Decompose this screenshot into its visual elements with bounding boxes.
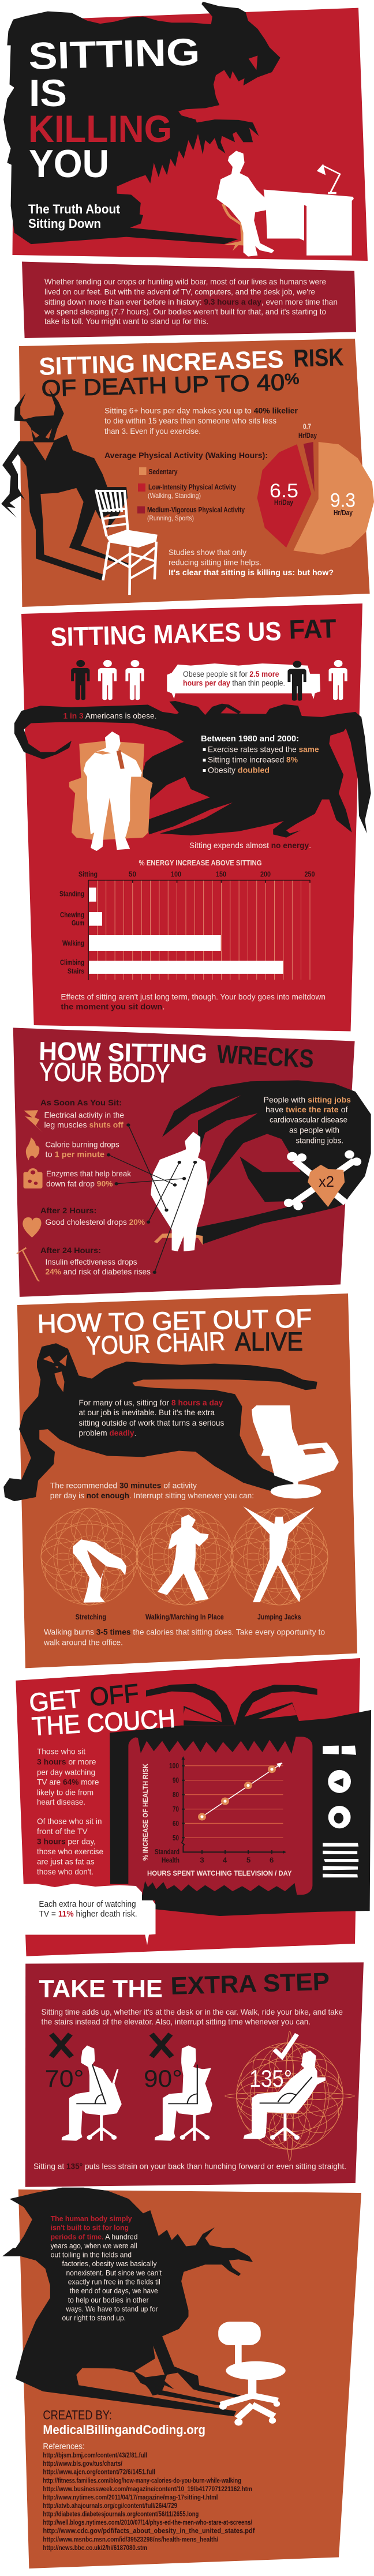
heading: makes us fat: FAT [289, 613, 336, 644]
closing text: our right to stand up. [62, 2313, 126, 2322]
studies text [169, 548, 334, 577]
posture 70 degrees [45, 2034, 122, 2141]
heading: wrecks your body [39, 1036, 315, 1088]
references: http://atvb.ahajournals.org/cgi/content/full/26/4/729 [43, 2502, 177, 2510]
heading: Sitting Is Killing You: SITTING [28, 30, 200, 77]
panel: sitting makes us fat [14, 603, 371, 1032]
text: tv heart disease [37, 1747, 103, 1876]
text: 8 hours a day: problem deadly. [78, 1428, 136, 1438]
bar chart: energy increase: Walking [62, 939, 84, 947]
pie chart: Hr/Day [298, 431, 317, 440]
effects after 24 hours: 24% and risk of diabetes rises [45, 1267, 151, 1276]
body text: 40% likelier: than 3. Even if you exercise. [104, 426, 201, 436]
panel: title [3, 2, 368, 261]
stats: 1980 to 2000: Between 1980 and 2000: [201, 734, 299, 744]
heading: Sitting Is Killing You: YOU [29, 142, 109, 186]
icons: lightning, flame, scale, heart, syringe [16, 1110, 43, 1281]
text: sitting jobs: as people with [289, 1126, 339, 1135]
text: 8 hours a day: For many of us, sitting for 8 hours a day [78, 1398, 223, 1407]
stats: 1980 to 2000 [201, 734, 319, 774]
text: tv heart disease: 3 hours per day, [37, 1837, 96, 1846]
line chart: health risk: % INCREASE OF HEALTH RISK [143, 1763, 149, 1861]
effects after 2 hours: After 2 Hours: [40, 1206, 96, 1215]
heading: risk of death [39, 343, 344, 402]
monster shadow: bear [3, 2, 280, 244]
posture 135 degrees: 135° [249, 2065, 292, 2092]
bar chart: energy increase: Climbing [60, 958, 84, 967]
line chart: health risk: HOURS SPENT WATCHING TELEVISION / DAY [147, 1869, 292, 1877]
text: sitting jobs: People with sitting jobs [264, 1095, 351, 1104]
closing text: to help our bodies in other [68, 2296, 149, 2304]
monster hand [162, 1080, 371, 1244]
line chart: health risk: 5 [246, 1855, 250, 1865]
references: http://diabetes.diabetesjournals.org/content/56/11/2655.long [43, 2510, 199, 2518]
heading: chair alive: HOW TO GET OUT OF [37, 1303, 312, 1338]
effects as soon as you sit: to 1 per minute [45, 1150, 104, 1159]
chart legend: (Walking, Standing) [148, 492, 201, 500]
text: less strain: Sitting at 135° puts less strain on your back than hunching forward or even sitting straight. [33, 2162, 346, 2171]
crossbones with heart x2: x2 [319, 1173, 334, 1190]
bar chart: energy increase [59, 859, 315, 980]
posture 135 degrees [244, 2034, 326, 2141]
closing text: isn't built to sit for long [51, 2223, 129, 2232]
TV buttons and knobs [323, 1746, 358, 1877]
pie chart [257, 422, 374, 554]
references [43, 2442, 255, 2552]
intro text: we spend sleeping (7.7 hours). Our bodies weren't built for that, and it's starting to [44, 307, 326, 316]
closing text: exactly run free in the fields til [68, 2278, 160, 2286]
man in armchair [69, 732, 153, 851]
bar chart: energy increase: 50 [129, 870, 136, 879]
heading: Sitting Is Killing You [28, 30, 200, 186]
chart legend: (Running, Sports) [147, 514, 194, 522]
bar chart: energy increase: % ENERGY INCREASE ABOVE SITTING [139, 859, 262, 867]
posture 90 degrees: 90° [144, 2065, 182, 2092]
line chart: health risk: 3 [200, 1855, 204, 1865]
text: sitting jobs [264, 1095, 351, 1145]
line chart: health risk [143, 1756, 292, 1877]
effects after 24 hours: After 24 Hours: [40, 1246, 101, 1255]
stats: 1980 to 2000: Exercise rates stayed the same [208, 744, 319, 753]
line chart: health risk: 60 [173, 1819, 179, 1828]
exercise figures [73, 1506, 315, 1603]
text: meltdown: Effects of sitting aren't just long term, though. Your body goes into meltdown [61, 992, 326, 1002]
line chart: health risk: 6 [270, 1855, 274, 1865]
closing text: factories, obesity was basically [62, 2259, 157, 2268]
references: http://www.bls.gov/tus/charts/ [43, 2459, 123, 2468]
chart legend [104, 451, 268, 522]
white office chair [252, 1405, 339, 1498]
bar chart: energy increase: 100 [171, 870, 181, 879]
text: sitting jobs: standing jobs. [296, 1135, 343, 1145]
chart legend: Average Physical Activity (Waking Hours): [104, 451, 268, 460]
heading: chair alive: YOUR CHAIR [86, 1326, 226, 1360]
closing text: ways. We have to stand up for [66, 2304, 158, 2313]
heading: risk of death: RISK [293, 343, 344, 373]
bar chart: energy increase: Gum [72, 918, 84, 927]
heading: risk of death: OF DEATH UP TO 40 [41, 370, 264, 402]
exercise labels: Jumping Jacks [257, 1613, 301, 1621]
panel: risk of death [1, 339, 374, 607]
ghost monster [3, 1343, 317, 1501]
couch with obesity stat: Obese people sit for 2.5 more [183, 670, 279, 678]
callout: 11% higher death risk [0, 1884, 156, 1945]
chart legend: Low-Intensity Physical Activity [148, 483, 237, 492]
panel: introduction [22, 262, 356, 338]
seated man [151, 1132, 208, 1251]
exercise labels: Stretching [76, 1613, 106, 1621]
effects as soon as you sit: As Soon As You Sit: [40, 1098, 122, 1107]
references: References: [43, 2442, 85, 2451]
body text: 40% likelier [104, 406, 298, 436]
heading: chair alive [37, 1303, 312, 1360]
intro text: Whether tending our crops or hunting wild boar, most of our lives as humans were [44, 277, 326, 286]
closing text: The human body simply [51, 2214, 132, 2223]
line chart: health risk: Standard [155, 1847, 179, 1856]
references: http://news.bbc.co.uk/2/hi/6187080.stm [43, 2544, 147, 2552]
text: tv heart disease: Of those who sit in [37, 1816, 102, 1825]
bar chart: energy increase: 200 [260, 870, 271, 879]
text: 30 minutes: per day is not enough. Interrupt sitting whenever you can: [50, 1491, 254, 1500]
body text: 40% likelier: to die within 15 years than someone who sits less [104, 416, 276, 425]
references: http://www.ajcn.org/content/72/6/1451.full [43, 2468, 155, 2476]
heading: wrecks your body: WRECKS [216, 1039, 315, 1074]
studies text: It's clear that sitting is killing us: but how? [169, 568, 334, 577]
text: tv heart disease: those who don't. [37, 1867, 94, 1876]
heading: get off the couch: GET [28, 1683, 83, 1718]
subtitle: The Truth About [28, 202, 121, 216]
callout: 11% higher death risk: TV = 11% higher death risk. [39, 1910, 137, 1919]
references: http://www.cdc.gov/pdf/facts_about_obesity_in_the_united_states.pdf [43, 2527, 255, 2535]
stat: 1 in 3: 1 in 3 Americans is obese. [63, 711, 157, 721]
text: tv heart disease: heart disease. [37, 1797, 85, 1806]
bar chart: energy increase: 250 [305, 870, 315, 879]
closing text: periods of time. A hundred [51, 2232, 137, 2241]
text: meltdown [61, 992, 326, 1011]
text: walking burns: walk around the office. [43, 1637, 123, 1647]
credit: MedicalBillingandCoding.org [43, 2423, 205, 2437]
icons: one in three people [71, 660, 347, 701]
heading: extra step: TAKE THE [39, 1975, 163, 2003]
effects as soon as you sit: leg muscles shuts off [44, 1120, 124, 1130]
effects as soon as you sit: Calorie burning drops [45, 1140, 119, 1149]
title background [13, 8, 368, 261]
line chart: health risk: 70 [173, 1805, 179, 1813]
intro text: lived on our feet. But with the advent of TV, computers, and the desk job, we're [44, 287, 315, 297]
stats: 1980 to 2000: Sitting time increased 8% [208, 755, 298, 764]
effects after 24 hours: Insulin effectiveness drops [45, 1257, 137, 1266]
posture 90 degrees [144, 2034, 212, 2141]
references: http://well.blogs.nytimes.com/2010/07/14/phys-ed-the-men-who-stare-at-screens/ [43, 2518, 252, 2526]
chart legend: Sedentary [149, 467, 178, 476]
intro text: sitting down more than ever before in history: 9.3 hours a day, even more time than [44, 297, 338, 306]
closing text: out toiling in the fields and [51, 2251, 132, 2259]
heading: chair alive: ALIVE [235, 1327, 303, 1356]
heading: wrecks your body: YOUR BODY [39, 1057, 170, 1088]
pie chart: Hr/Day [334, 508, 353, 517]
line chart: health risk: 50 [173, 1833, 179, 1842]
body text: 40% likelier: Sitting 6+ hours per day makes you up to 40% likelier [104, 406, 298, 415]
subtitle: Sitting Down [28, 216, 101, 231]
text: 30 minutes: The recommended 30 minutes of activity [50, 1481, 197, 1490]
heading: risk of death: % [285, 370, 300, 388]
credit [43, 2408, 205, 2437]
callout: 11% higher death risk: Each extra hour of watching [39, 1900, 136, 1909]
references: http://www.businessweek.com/magazine/content/10_19/b4177071221162.htm [43, 2485, 252, 2493]
heading: risk of death: SITTING INCREASES [39, 346, 284, 381]
references: http://www.nytimes.com/2011/04/17/magazine/mag-17sitting-t.html [43, 2493, 218, 2501]
chart legend: Medium-Vigorous Physical Activity [147, 505, 245, 514]
references: http://www.msnbc.msn.com/id/39523298/ns/health-mens_health/ [43, 2535, 219, 2543]
couch with obesity stat [167, 663, 320, 699]
studies text: Studies show that only [169, 548, 246, 557]
desk worker silhouette [216, 151, 354, 257]
references: http://bjsm.bmj.com/content/43/2/81.full [43, 2451, 147, 2459]
heading: get off the couch: THE COUCH [31, 1704, 176, 1741]
heading: Sitting Is Killing You: IS [29, 72, 67, 114]
panel: how to get out of your chair [3, 1293, 357, 1668]
text: walking burns [43, 1628, 325, 1647]
exercise labels: Walking/Marching In Place [145, 1613, 224, 1621]
text: 30 minutes [50, 1481, 254, 1500]
line chart: health risk: 90 [173, 1776, 179, 1784]
effects after 2 hours [40, 1206, 145, 1227]
heading: get off the couch: OFF [88, 1678, 140, 1712]
text: tv heart disease: 3 hours or more [37, 1757, 96, 1767]
panel: get off the couch [0, 1658, 371, 1956]
line chart: health risk: Health [162, 1855, 179, 1865]
text: tv heart disease: front of the TV [37, 1827, 88, 1836]
heading: wrecks your body: HOW SITTING [39, 1036, 208, 1068]
couch with obesity stat: hours per day than thin people. [183, 679, 285, 688]
text: 8 hours a day: at our job is inevitable. But it's the extra [78, 1408, 215, 1417]
closing text: years ago, when we were all [51, 2241, 137, 2250]
pie chart: 0.7 [303, 422, 311, 431]
credit: CREATED BY: [43, 2408, 112, 2423]
heading: extra step [39, 1968, 330, 2003]
text: tv heart disease: TV are 64% more [37, 1777, 99, 1786]
text: sitting jobs: cardiovascular disease [270, 1115, 347, 1124]
effects as soon as you sit: Enzymes that help break [46, 1169, 132, 1178]
heading: get off the couch [28, 1678, 176, 1741]
text: tv heart disease: those who exercise [37, 1847, 103, 1856]
posture 70 degrees: 70° [45, 2065, 84, 2092]
stats: 1980 to 2000: Obesity doubled [208, 765, 270, 774]
bar chart: energy increase: Chewing [60, 910, 84, 919]
references: http://fitness.families.com/blog/how-many-calories-do-you-burn-while-walking [43, 2476, 241, 2484]
heading: extra step: EXTRA STEP [170, 1968, 330, 2000]
text: tv heart disease: per day watching [37, 1767, 95, 1776]
effects as soon as you sit [40, 1098, 132, 1188]
panel: conclusion [2, 2188, 361, 2568]
crossbones with heart x2 [284, 1150, 361, 1210]
text: time adds up: Sitting time adds up, whether it's at the desk or in the car. Walk, ride your bike, and take [42, 2007, 343, 2016]
bar chart: energy increase: Stairs [68, 967, 84, 975]
white chair [95, 490, 158, 595]
monster television [110, 1684, 371, 1916]
dragon monster [2, 2188, 253, 2416]
studies text: reducing sitting time helps. [169, 557, 261, 567]
bar chart: energy increase: 150 [216, 870, 226, 879]
devil shadow [1, 389, 129, 580]
closing text: the end of our days, we have [70, 2286, 158, 2295]
closing text: nonexistent. But since we can't [66, 2268, 162, 2277]
exercise labels [76, 1613, 301, 1621]
panel: take the extra step [25, 1962, 364, 2187]
text: tv heart disease: Those who sit [37, 1747, 85, 1756]
text: 8 hours a day [78, 1398, 224, 1438]
panel: how sitting wrecks your body [13, 1028, 371, 1297]
pie chart: Hr/Day [274, 498, 294, 507]
intro text [44, 277, 338, 325]
line chart: health risk: 4 [223, 1855, 227, 1865]
bar chart: energy increase: Sitting [78, 870, 98, 879]
text: time adds up: the stairs instead of the elevator. Also, interrupt sitting time whenever you can. [42, 2017, 311, 2026]
tentacled monster [14, 701, 371, 838]
effects as soon as you sit: down fat drop 90% [46, 1179, 113, 1188]
rosette behind 135 degree posture [225, 2031, 354, 2161]
geometric rosettes [41, 1508, 328, 1605]
pie chart: 6.5 [270, 480, 298, 502]
closing text [51, 2214, 162, 2322]
line chart: health risk: 80 [173, 1790, 179, 1799]
pie chart: 9.3 [330, 490, 356, 512]
intro text: take its toll. You might want to stand up for this. [44, 316, 208, 325]
text: time adds up [42, 2007, 343, 2026]
text: sitting jobs: have twice the rate of [265, 1105, 348, 1114]
white swivel chair [218, 2322, 286, 2425]
bar chart: energy increase: Standing [59, 890, 84, 898]
effects after 2 hours: Good cholesterol drops 20% [45, 1217, 145, 1227]
text: tv heart disease: are just as fat as [37, 1857, 95, 1866]
pointer lines to body [107, 1124, 197, 1273]
text: walking burns: Walking burns 3-5 times the calories that sitting does. Take every opportunity to [44, 1628, 325, 1637]
heading: makes us fat: SITTING MAKES US [50, 616, 282, 652]
subtitle [28, 202, 121, 231]
effects as soon as you sit: Electrical activity in the [44, 1110, 124, 1119]
text: 8 hours a day: sitting outside of work that turns a serious [78, 1418, 224, 1427]
text: meltdown: the moment you sit down . [61, 1002, 164, 1011]
text: tv heart disease: likely to die from [37, 1787, 94, 1797]
line chart: health risk: 100 [169, 1761, 179, 1770]
effects after 24 hours [40, 1246, 151, 1276]
heading: Sitting Is Killing You: KILLING [28, 107, 172, 150]
text: no energy: Sitting expends almost no energy. [189, 841, 311, 850]
